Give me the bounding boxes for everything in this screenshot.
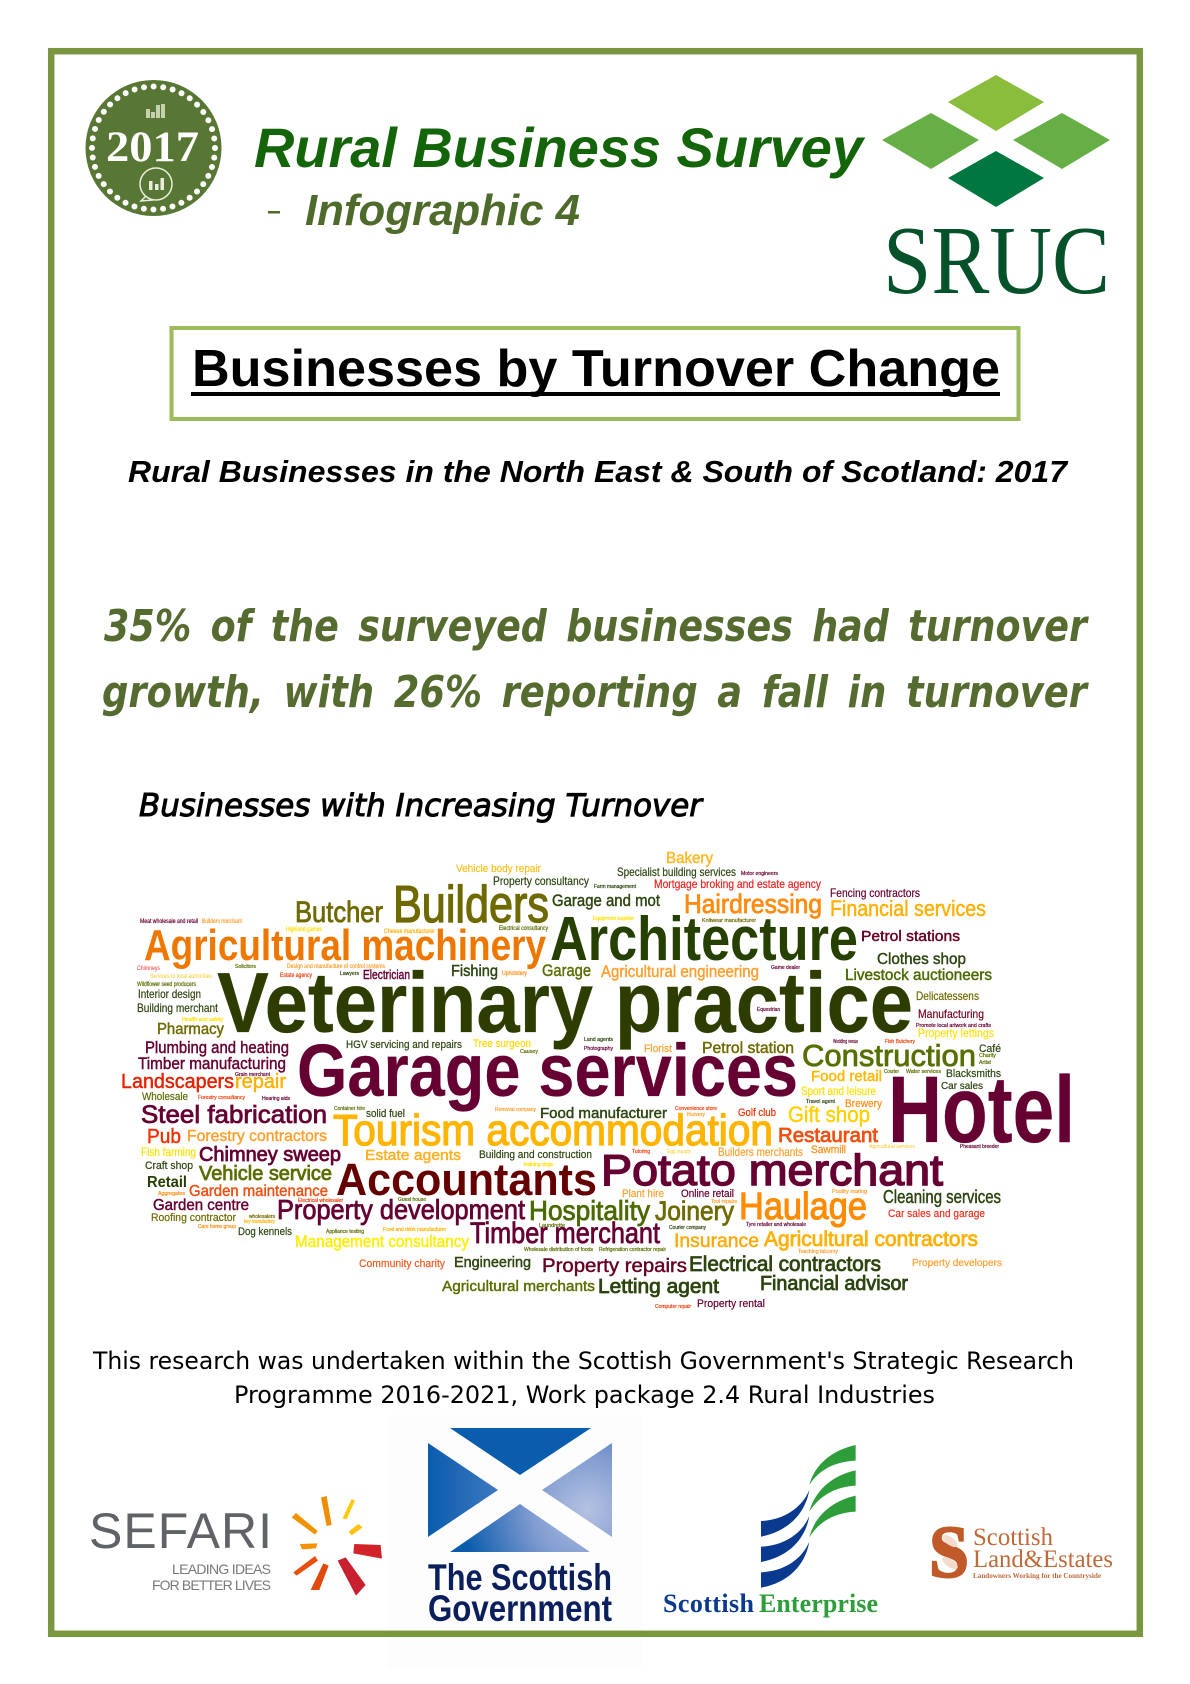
- word cloud: businesses with increasing turnover: Community charity: [359, 1258, 445, 1270]
- word cloud: businesses with increasing turnover: Removal company: [495, 1107, 536, 1113]
- word cloud: businesses with increasing turnover: Tutoring: [632, 1149, 650, 1155]
- word cloud: businesses with increasing turnover: Tyre retailer and wholesale: [746, 1222, 806, 1228]
- word: Veterinary practice: Veterinary practice: [217, 956, 913, 1051]
- logo: Scottish Land & Estates: S: [929, 1512, 969, 1594]
- word cloud: businesses with increasing turnover: Wholesale distribution of foods: [524, 1247, 594, 1253]
- word cloud: businesses with increasing turnover: Specialist building services: [617, 865, 736, 879]
- word cloud: businesses with increasing turnover: Garden centre: [153, 1197, 249, 1214]
- word cloud: businesses with increasing turnover: Electrical contractors: [689, 1253, 881, 1276]
- word cloud: businesses with increasing turnover: Food retail: [811, 1068, 882, 1085]
- word cloud: businesses with increasing turnover: Chimney sweep: [199, 1144, 341, 1166]
- word cloud: businesses with increasing turnover: Manufacturing: [918, 1007, 984, 1021]
- badge: 2017 survey seal: [86, 80, 222, 216]
- word cloud: businesses with increasing turnover: repair: [235, 1071, 286, 1093]
- word cloud: businesses with increasing turnover: Retail: [147, 1174, 187, 1191]
- title box: Businesses by Turnover Change: [172, 328, 1018, 419]
- word cloud: businesses with increasing turnover: Aggregates: [158, 1191, 186, 1197]
- logo: SEFARI: SEFARI: [89, 1503, 272, 1559]
- word cloud: businesses with increasing turnover: Grain merchant: [235, 1072, 271, 1078]
- word cloud: businesses with increasing turnover: Mortgage broking and estate agency: [654, 877, 821, 891]
- word: Builders: Builders: [393, 876, 549, 934]
- word cloud: businesses with increasing turnover: Agricultural contractors: [764, 1228, 978, 1251]
- word: Tourism accommodation: Tourism accommodation: [333, 1106, 773, 1155]
- word cloud: businesses with increasing turnover: Wildflower seed producers: [137, 982, 196, 988]
- word cloud: businesses with increasing turnover: Property lettings: [918, 1026, 994, 1040]
- word cloud: businesses with increasing turnover: Property developers: [912, 1258, 1002, 1269]
- word cloud: businesses with increasing turnover: Timber merchant: [470, 1217, 661, 1250]
- word cloud: businesses with increasing turnover: Fencing contractors: [830, 886, 920, 900]
- word cloud: businesses with increasing turnover: Nursery: [687, 1112, 706, 1118]
- word: Accountants: Accountants: [336, 1154, 597, 1205]
- word cloud: businesses with increasing turnover: Brewery: [845, 1098, 882, 1110]
- word cloud: businesses with increasing turnover: Container hire: [334, 1106, 365, 1112]
- word cloud: businesses with increasing turnover: Convenience store: [675, 1106, 717, 1112]
- word cloud: businesses with increasing turnover: Restaurant: [778, 1125, 878, 1147]
- word cloud: businesses with increasing turnover: Dog kennels: [238, 1226, 292, 1238]
- logo: SRUC: SRUC: [883, 207, 1110, 315]
- word cloud: businesses with increasing turnover: Pharmacy: [157, 1021, 224, 1038]
- word cloud: businesses with increasing turnover: Pheasant breeder: [960, 1144, 999, 1150]
- research acknowledgement text: This research was undertaken within the Scottish Government's Strategic Research: [92, 1347, 1074, 1375]
- word cloud: businesses with increasing turnover: Plant hire: [622, 1188, 664, 1200]
- word cloud: businesses with increasing turnover: Delicatessens: [916, 989, 979, 1003]
- word cloud: businesses with increasing turnover: Design and manufacture of control systems: [287, 964, 385, 970]
- word cloud: businesses with increasing turnover: Blacksmiths: [946, 1068, 1001, 1080]
- logo: Scottish Land & Estates: Land&Estates: [973, 1546, 1113, 1573]
- word cloud: businesses with increasing turnover: Builders merchant: [202, 919, 242, 925]
- word cloud: businesses with increasing turnover: Charity: [979, 1053, 997, 1059]
- word cloud: businesses with increasing turnover: Gift shop: [788, 1102, 870, 1127]
- word cloud: businesses with increasing turnover: Clothes shop: [877, 951, 966, 968]
- word cloud: businesses with increasing turnover: Landscapers: [121, 1071, 234, 1093]
- word cloud: businesses with increasing turnover: Café: [979, 1043, 1001, 1055]
- word cloud: businesses with increasing turnover: Craft shop: [145, 1160, 193, 1172]
- word cloud: businesses with increasing turnover: Fishing: [451, 963, 498, 980]
- word cloud: businesses with increasing turnover: Butcher: [295, 896, 383, 929]
- logo: SEFARI: [89, 1496, 382, 1596]
- word cloud: businesses with increasing turnover: Fish farming: [141, 1145, 196, 1159]
- word cloud: businesses with increasing turnover: Florist: [644, 1043, 672, 1055]
- word cloud: businesses with increasing turnover: Upholstery: [502, 971, 527, 977]
- word cloud: businesses with increasing turnover: Health and safety: [182, 1017, 224, 1023]
- word cloud: businesses with increasing turnover: Interior design: [138, 987, 201, 1001]
- word cloud: businesses with increasing turnover: Care home group: [198, 1224, 236, 1230]
- word cloud: businesses with increasing turnover: Car sales and garage: [888, 1208, 985, 1220]
- word cloud: businesses with increasing turnover: Garden maintenance: [189, 1183, 328, 1200]
- word cloud: businesses with increasing turnover: Property repairs: [542, 1256, 687, 1277]
- badge: 2017 survey seal: 2017: [106, 124, 199, 171]
- word cloud: businesses with increasing turnover: Courier company: [669, 1225, 706, 1231]
- word cloud: businesses with increasing turnover: Steel fabrication: [141, 1101, 327, 1129]
- word cloud: businesses with increasing turnover: Land agents: [584, 1037, 614, 1043]
- word cloud: businesses with increasing turnover: Food and drink manufacturer: [383, 1227, 446, 1233]
- word cloud: businesses with increasing turnover: Livestock auctioneers: [845, 967, 992, 984]
- word cloud: businesses with increasing turnover: [121, 850, 1075, 1310]
- word cloud: businesses with increasing turnover: Fish Butchery: [885, 1039, 915, 1045]
- word cloud: businesses with increasing turnover: Teaching falconry: [798, 1249, 839, 1255]
- heading: Rural Business Survey: Rural Business Survey: [254, 116, 866, 179]
- word cloud: businesses with increasing turnover: Builders merchants: [718, 1145, 803, 1159]
- word cloud: businesses with increasing turnover: Highland games: [286, 927, 322, 933]
- logo: The Scottish Government: The Scottish: [428, 1557, 612, 1598]
- word cloud: businesses with increasing turnover: Garage and mot: [552, 891, 660, 910]
- word cloud: businesses with increasing turnover: Forestry consultancy: [198, 1095, 245, 1101]
- word cloud: businesses with increasing turnover: Courier: [884, 1069, 899, 1075]
- word cloud: businesses with increasing turnover: training dogs: [524, 1162, 553, 1168]
- word cloud: businesses with increasing turnover: Online retail: [681, 1188, 734, 1200]
- logo: Scottish Enterprise: Enterprise: [759, 1589, 878, 1618]
- word cloud: businesses with increasing turnover: Agricultural services: [869, 1144, 915, 1150]
- logo backing panel: Scottish Government: [388, 1415, 642, 1668]
- word cloud: businesses with increasing turnover: Travel agent: [806, 1099, 836, 1105]
- word cloud: businesses with increasing turnover: Egg supply: [667, 1149, 691, 1155]
- word cloud: businesses with increasing turnover: HGV servicing and repairs: [346, 1039, 462, 1051]
- word cloud: businesses with increasing turnover: Electrician: [363, 967, 410, 982]
- word cloud: businesses with increasing turnover: Building and construction: [479, 1149, 592, 1161]
- word cloud: businesses with increasing turnover: Bakery: [666, 850, 713, 867]
- word cloud: businesses with increasing turnover: solid fuel: [366, 1108, 405, 1120]
- word cloud: businesses with increasing turnover: Wholesale: [142, 1091, 188, 1103]
- title box: Businesses by Turnover Change: Businesses by Turnover Change: [192, 340, 1000, 398]
- word cloud: businesses with increasing turnover: Hairdressing: [684, 889, 822, 919]
- word cloud: businesses with increasing turnover: Guest house: [398, 1197, 426, 1203]
- logo: SEFARI: FOR BETTER LIVES: [152, 1577, 271, 1593]
- word cloud: businesses with increasing turnover: Vehicle body repair: [456, 863, 541, 875]
- word cloud: businesses with increasing turnover: Pub: [147, 1126, 181, 1148]
- word cloud: businesses with increasing turnover: Insurance: [674, 1231, 759, 1252]
- word cloud: businesses with increasing turnover: Knitwear manufacturer: [702, 918, 756, 924]
- logo: Scottish Land & Estates: Scottish: [973, 1524, 1053, 1551]
- word cloud: businesses with increasing turnover: Photography: [584, 1046, 614, 1052]
- word cloud: businesses with increasing turnover: Estate agents: [365, 1147, 461, 1164]
- word cloud: businesses with increasing turnover: Game dealer: [771, 965, 800, 971]
- word cloud: businesses with increasing turnover: Tool repairs: [711, 1199, 737, 1205]
- word cloud: businesses with increasing turnover: Agricultural engineering: [601, 962, 759, 981]
- logo: Scottish Land & Estates: [929, 1512, 1113, 1594]
- word cloud: businesses with increasing turnover: Vehicle service: [199, 1163, 332, 1185]
- word cloud: businesses with increasing turnover: Cheese manufacturer: [384, 929, 435, 935]
- word cloud: businesses with increasing turnover: Laundrette: [539, 1223, 565, 1229]
- word cloud: businesses with increasing turnover: Petrol stations: [861, 928, 960, 945]
- word cloud: businesses with increasing turnover: Equestrian: [757, 1007, 780, 1013]
- word cloud: businesses with increasing turnover: Golf club: [738, 1107, 776, 1119]
- research acknowledgement text: [92, 1347, 1074, 1409]
- word cloud: businesses with increasing turnover: Management consultancy: [295, 1232, 469, 1251]
- word cloud: businesses with increasing turnover: Petrol station: [702, 1040, 794, 1057]
- word cloud: businesses with increasing turnover: Chimneys: [137, 966, 160, 972]
- word cloud: businesses with increasing turnover: Property development: [277, 1194, 525, 1225]
- word cloud: businesses with increasing turnover: Lawyers: [340, 971, 360, 977]
- word cloud: businesses with increasing turnover: Equipment supplier: [593, 916, 634, 922]
- word: Haulage: Haulage: [739, 1186, 867, 1228]
- logo: SEFARI: LEADING IDEAS: [172, 1561, 271, 1577]
- word cloud: businesses with increasing turnover: Appliance testing: [326, 1229, 364, 1235]
- word cloud: businesses with increasing turnover: Hospitality: [529, 1195, 650, 1226]
- word cloud: businesses with increasing turnover: Solicitors: [235, 964, 257, 970]
- word cloud: businesses with increasing turnover: Plumbing and heating: [145, 1038, 289, 1057]
- word cloud: businesses with increasing turnover: Property consultancy: [493, 874, 589, 888]
- word cloud: businesses with increasing turnover: Garage: [542, 961, 591, 980]
- research acknowledgement text: Programme 2016-2021, Work package 2.4 Rural Industries: [234, 1381, 935, 1409]
- word cloud: businesses with increasing turnover: Computer repair: [655, 1304, 691, 1310]
- word cloud: businesses with increasing turnover: key manufactory: [244, 1219, 275, 1225]
- logo: SRUC: [882, 75, 1110, 315]
- word cloud: businesses with increasing turnover: Poultry rearing: [832, 1189, 867, 1195]
- word cloud: businesses with increasing turnover: Sport and leisure: [801, 1084, 876, 1098]
- word cloud: businesses with increasing turnover: Wedding venue: [833, 1039, 858, 1045]
- word cloud: businesses with increasing turnover: Motor engineers: [741, 871, 779, 877]
- word cloud: businesses with increasing turnover: Tree surgeon: [473, 1038, 531, 1050]
- word cloud: businesses with increasing turnover: Engineering: [454, 1254, 531, 1271]
- headline statement: [102, 601, 1089, 718]
- word cloud: businesses with increasing turnover: Car sales: [941, 1081, 983, 1092]
- word cloud: businesses with increasing turnover: Artist: [979, 1060, 992, 1066]
- word cloud: businesses with increasing turnover: Letting agent: [598, 1276, 719, 1298]
- word cloud: businesses with increasing turnover: Electrical consultancy: [499, 926, 548, 932]
- word cloud: businesses with increasing turnover: Promote local artwork and crafts: [916, 1023, 992, 1029]
- word cloud: businesses with increasing turnover: Joinery: [655, 1196, 734, 1226]
- word cloud: businesses with increasing turnover: Cleaning services: [883, 1187, 1001, 1207]
- word cloud: businesses with increasing turnover: Sawmill: [811, 1144, 846, 1156]
- word cloud: businesses with increasing turnover: Estate agency: [280, 973, 312, 979]
- logo: The Scottish Government: Government: [428, 1588, 612, 1629]
- logo: Scottish Enterprise: [663, 1445, 878, 1618]
- word: Construction: Construction: [802, 1038, 976, 1073]
- word cloud: businesses with increasing turnover: Refrigeration contractor repair: [599, 1247, 666, 1253]
- word cloud: businesses with increasing turnover: Electrical wholesaler: [298, 1198, 343, 1204]
- word cloud: businesses with increasing turnover: Forestry contractors: [187, 1128, 327, 1145]
- word cloud: businesses with increasing turnover: wholesalers: [249, 1214, 275, 1220]
- word cloud: businesses with increasing turnover: Water services: [906, 1069, 942, 1075]
- word cloud: businesses with increasing turnover: Farm management: [594, 884, 637, 890]
- word: Architecture: Architecture: [550, 905, 858, 974]
- word cloud: businesses with increasing turnover: Roofing contractor: [151, 1212, 236, 1224]
- word cloud: businesses with increasing turnover: Property rental: [697, 1298, 765, 1310]
- word cloud: businesses with increasing turnover: Causey: [520, 1049, 539, 1055]
- subheading: Infographic 4: Infographic 4: [305, 186, 580, 235]
- word cloud: businesses with increasing turnover: Meat wholesale and retail: [140, 919, 198, 925]
- word: Garage services: Garage services: [297, 1029, 798, 1112]
- logo: Scottish Land & Estates: Landowners Working for the Countryside: [973, 1572, 1101, 1580]
- word cloud: businesses with increasing turnover: Timber manufacturing: [138, 1054, 286, 1073]
- subtitle: Rural Businesses in the North East & South of Scotland: 2017: [128, 454, 1069, 489]
- word cloud: businesses with increasing turnover: Financial services: [830, 896, 986, 921]
- logo: The Scottish Government: [428, 1428, 612, 1629]
- word cloud: businesses with increasing turnover: Building merchant: [137, 1001, 219, 1015]
- word: Hotel: Hotel: [888, 1057, 1075, 1163]
- word: Potato merchant: Potato merchant: [601, 1146, 943, 1195]
- logo: Scottish Enterprise: Scottish: [663, 1589, 755, 1618]
- word cloud: businesses with increasing turnover: Financial advisor: [760, 1273, 908, 1295]
- word cloud: businesses with increasing turnover: Food manufacturer: [540, 1105, 667, 1122]
- word cloud: businesses with increasing turnover: Agricultural merchants: [442, 1278, 595, 1295]
- word cloud heading: Businesses with Increasing Turnover: [139, 788, 704, 824]
- word: Agricultural machinery: Agricultural machinery: [144, 921, 546, 970]
- word cloud: businesses with increasing turnover: Services to local authorities: [150, 974, 212, 980]
- word cloud: businesses with increasing turnover: Hearing aids: [262, 1096, 290, 1102]
